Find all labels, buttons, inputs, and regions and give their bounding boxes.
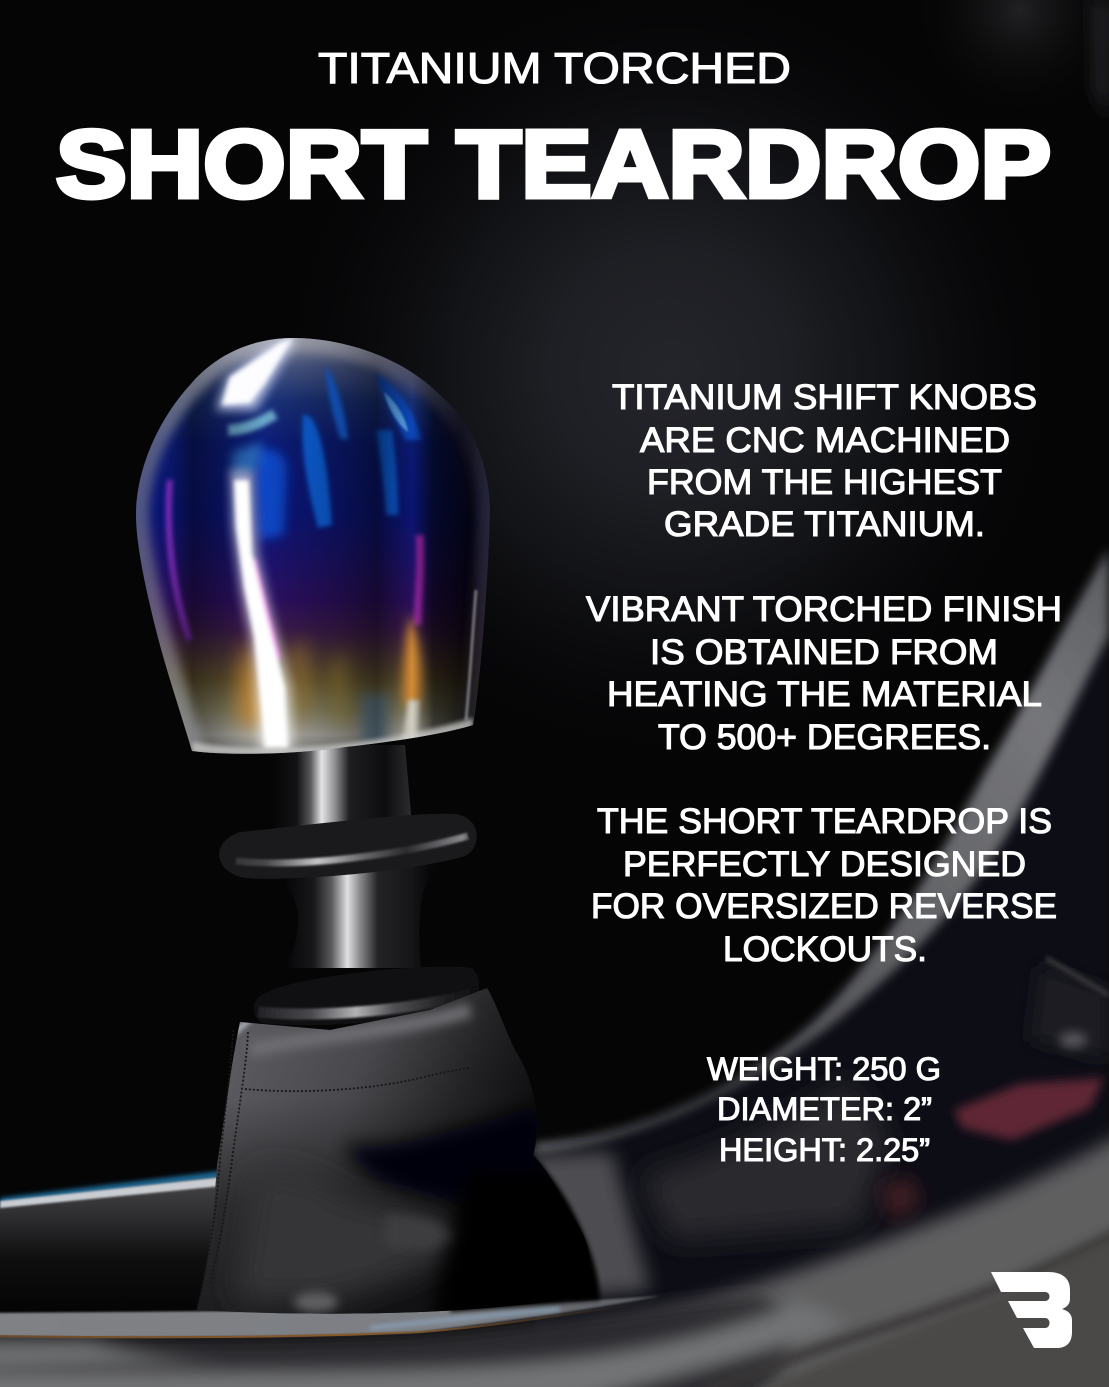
icon: brand logo bbox=[991, 1272, 1072, 1348]
text block: design: PERFECTLY DESIGNED bbox=[623, 845, 1026, 884]
text block: finish: IS OBTAINED FROM bbox=[650, 633, 998, 672]
text block: materials: GRADE TITANIUM. bbox=[664, 505, 985, 544]
neck bbox=[265, 855, 450, 968]
red reflection bbox=[954, 1078, 1104, 1140]
title: main: SHORT TEARDROP bbox=[56, 111, 1051, 218]
lower sweep bbox=[590, 1130, 1109, 1387]
orange glow bbox=[403, 615, 423, 705]
left dash padding bbox=[0, 1180, 225, 1316]
console panel bbox=[1030, 965, 1109, 1060]
console interior bbox=[535, 555, 1109, 1387]
text block: materials: FROM THE HIGHEST bbox=[647, 463, 1002, 502]
text block: finish: HEATING THE MATERIAL bbox=[607, 675, 1042, 714]
text block: design bbox=[591, 802, 1057, 969]
text block: design: LOCKOUTS. bbox=[723, 930, 927, 969]
title: eyebrow: TITANIUM TORCHED bbox=[318, 44, 791, 93]
metallic rim bbox=[136, 338, 490, 751]
stitching bbox=[197, 1030, 470, 1308]
violet edges bbox=[169, 480, 190, 640]
text block: finish bbox=[586, 590, 1062, 757]
dashboard and console bbox=[0, 548, 1109, 1387]
text block: design: THE SHORT TEARDROP IS bbox=[597, 802, 1052, 841]
lower right panel bbox=[700, 1230, 1109, 1387]
bottom dark floor bbox=[0, 1295, 789, 1387]
curved trim band bbox=[535, 548, 1109, 1152]
text block: materials bbox=[612, 378, 1037, 544]
text block: finish: VIBRANT TORCHED FINISH bbox=[586, 590, 1062, 629]
blue streaks bbox=[254, 449, 287, 540]
specifications: HEIGHT: 2.25” bbox=[719, 1132, 930, 1168]
text block: materials: TITANIUM SHIFT KNOBS bbox=[612, 378, 1037, 417]
leather boot bbox=[180, 988, 620, 1320]
gear shift knob bbox=[130, 330, 620, 1320]
specifications: DIAMETER: 2” bbox=[717, 1091, 932, 1127]
specifications: WEIGHT: 250 G bbox=[707, 1051, 941, 1087]
text block: finish: TO 500+ DEGREES. bbox=[658, 718, 991, 757]
bottom sill bbox=[0, 1296, 660, 1337]
collar ring bbox=[219, 814, 477, 879]
titanium knob head bbox=[130, 330, 500, 760]
text block: design: FOR OVERSIZED REVERSE bbox=[591, 887, 1057, 926]
specifications bbox=[707, 1051, 941, 1168]
right of boot bbox=[530, 1152, 650, 1300]
text block: materials: ARE CNC MACHINED bbox=[640, 421, 1010, 460]
black shaft bbox=[272, 745, 412, 840]
base flange bbox=[254, 967, 479, 1025]
white highlights bbox=[216, 334, 297, 410]
